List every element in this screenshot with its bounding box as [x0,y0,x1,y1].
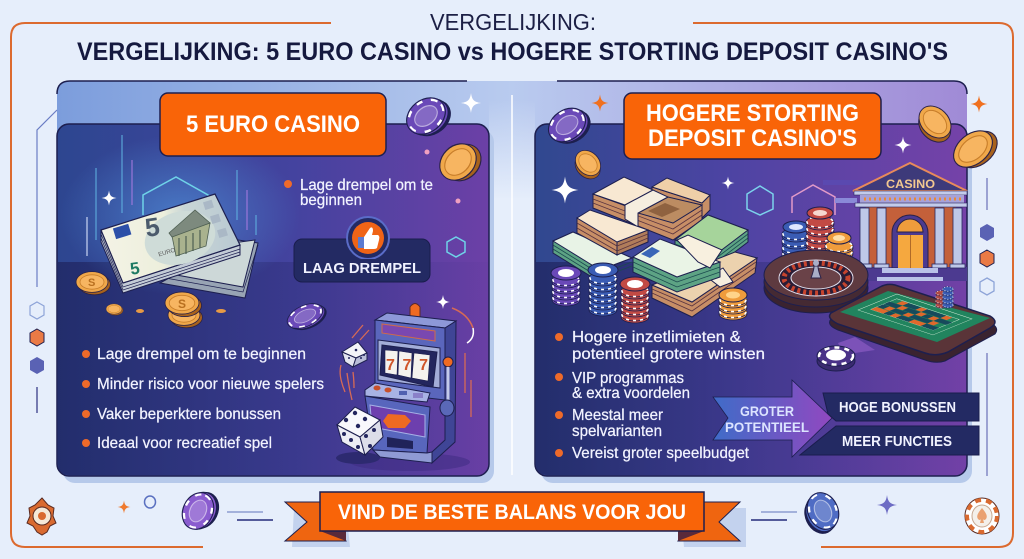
icon: casino building [823,163,967,281]
icon: betting table [830,284,997,362]
top bullet [284,177,433,209]
icon: casino chip stacks [782,207,853,262]
arrow: groter potentieel: POTENTIEEL [725,419,809,435]
title line 1: VERGELIJKING: [430,9,596,35]
icon: gold coins: S [88,277,95,289]
bullet list: spelvarianten [572,423,662,440]
top bullet: beginnen [300,192,362,209]
icon: slot machine: 777 [386,357,428,374]
arrow: groter potentieel: GROTER [740,403,794,419]
title [77,9,948,66]
bullet list [555,329,765,462]
heading: 5 euro casino [160,93,386,156]
panel: hogere storting [535,93,1004,483]
bullet list: VIP programmas [572,370,684,387]
bullet list [82,346,324,452]
icon: casino building: CASINO [886,179,935,191]
outer comparison panel [57,81,967,475]
bullet list: Minder risico voor nieuwe spelers [97,376,324,393]
icon: euro banknotes [101,194,258,298]
top bullet: Lage drempel om te [300,177,433,194]
panel: 5 euro casino [57,88,494,483]
badge: laag drempel [294,217,430,282]
icon: chip stacks [551,263,747,323]
right side decorations [980,178,994,476]
bullet list: & extra voordelen [572,385,690,402]
bullet list: Ideaal voor recreatief spel [97,435,272,452]
icon: roulette wheel [764,250,868,313]
badge: laag drempel: LAAG DREMPEL [303,260,421,277]
icon: gold coins: S [178,297,186,311]
bullet list: Vereist groter speelbudget [572,445,750,462]
neon decorations [87,135,465,257]
heading: 5 euro casino: 5 EURO CASINO [186,111,360,138]
title line 2: VERGELIJKING: 5 EURO CASINO vs HOGERE STORTING DEPOSIT CASINO'S [77,38,948,66]
icon: thumbs up [358,227,379,249]
icon: euro banknotes: EURO [158,248,176,258]
label bar: meer functies [800,426,979,455]
bullet list: potentieel grotere winsten [572,346,765,363]
icon: euro banknotes: 5 [129,259,141,279]
icon: chips and coin [283,88,488,336]
bullet list: Hogere inzetlimieten & [572,329,741,346]
bullet list: Vaker beperktere bonussen [97,406,281,423]
bottom right decorations [751,487,999,539]
ribbon banner: VIND DE BESTE BALANS VOOR JOU [338,501,686,524]
label bar: hoge bonussen: HOGE BONUSSEN [839,399,956,416]
left side decorations [30,110,57,413]
icon: gold coins [76,272,226,328]
bottom left decorations [27,485,273,536]
bullet list: Lage drempel om te beginnen [97,346,306,363]
icon: floating chips [542,100,1004,184]
icon: slot machine [340,304,473,471]
icon: chip and ticket [817,337,875,371]
icon: euro banknotes: 5 [143,211,161,243]
heading: hogere storting deposit casino's [624,93,881,159]
label bar: meer functies: MEER FUNCTIES [842,433,952,450]
heading: hogere storting deposit casino's: HOGERE STORTING [646,100,859,127]
icon: dice [336,342,383,464]
icon: stacks of banknotes [553,177,757,317]
neon hexagons [747,185,835,215]
heading: hogere storting deposit casino's: DEPOSIT CASINO'S [648,125,857,152]
label bar: hoge bonussen [823,393,979,421]
arrow: groter potentieel [713,380,832,457]
ribbon banner [285,492,746,547]
bullet list: Meestal meer [572,407,664,424]
